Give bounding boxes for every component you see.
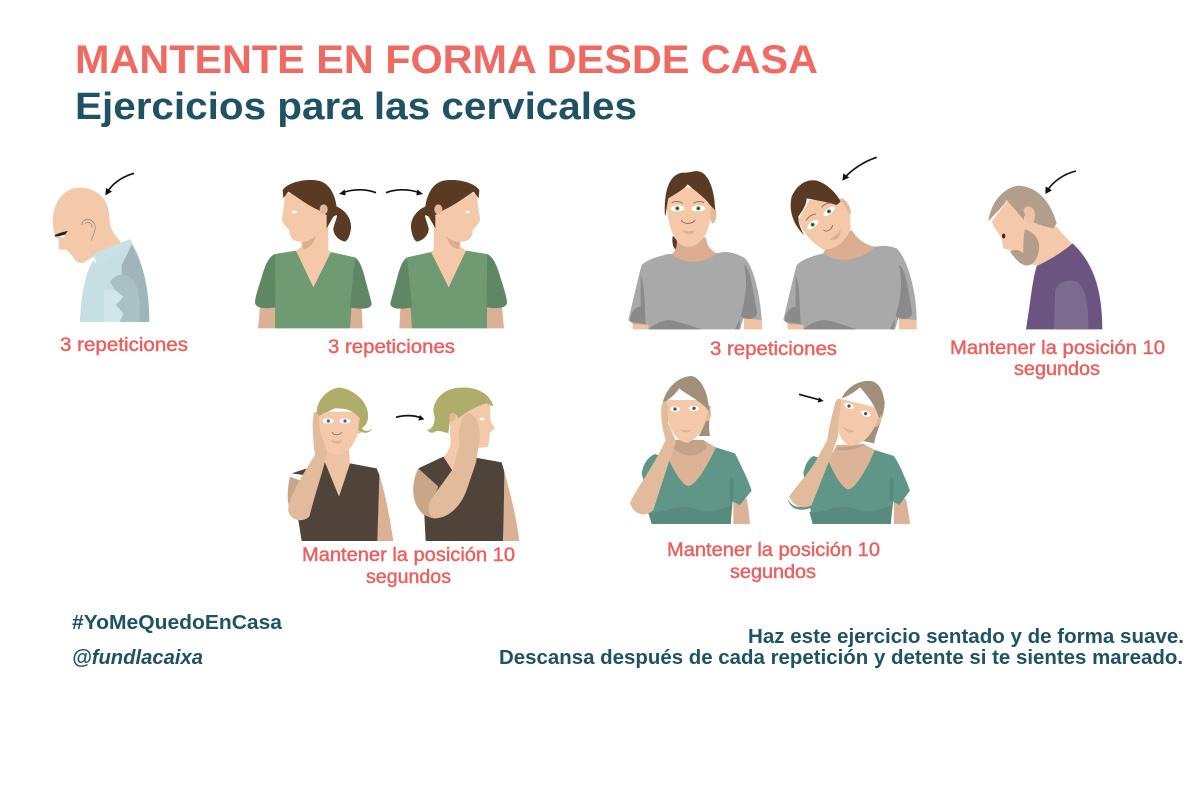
beard xyxy=(1010,229,1039,266)
sleeve edge xyxy=(788,498,812,510)
ear xyxy=(837,197,853,217)
hair xyxy=(665,171,715,217)
hair xyxy=(283,180,351,242)
chest xyxy=(828,444,875,489)
upper arm xyxy=(288,477,302,517)
shirt xyxy=(80,239,149,322)
shirt xyxy=(292,462,379,541)
eye xyxy=(465,211,470,213)
face xyxy=(799,198,851,249)
back hair xyxy=(862,400,885,443)
hair xyxy=(427,388,493,433)
eye xyxy=(1002,234,1005,238)
exercise 3: woman tilting head xyxy=(783,157,917,329)
label: exercise 5: Mantener la posición 10 xyxy=(302,544,515,566)
eyes xyxy=(670,406,680,412)
neck xyxy=(672,237,717,262)
neck and neckline xyxy=(325,450,350,497)
head xyxy=(665,171,715,247)
arrow xyxy=(386,189,423,195)
nose xyxy=(681,220,695,223)
ponytail xyxy=(824,247,830,253)
advice note: Haz este ejercicio sentado y de forma suave. xyxy=(748,626,1184,648)
mouth xyxy=(680,429,692,432)
shirt xyxy=(1026,243,1102,329)
neck shadow xyxy=(837,444,865,450)
exercise 6: woman tilting head against hand xyxy=(788,381,910,524)
upper arm xyxy=(413,468,438,518)
exercise 6: woman hand on cheek xyxy=(630,376,752,524)
hair xyxy=(317,388,372,433)
forearm and hand xyxy=(429,413,480,518)
shirt shadows xyxy=(630,265,757,329)
nose xyxy=(823,225,833,231)
shirt xyxy=(407,251,487,328)
shirt shadows xyxy=(785,265,912,329)
advice note: Descansa después de cada repetición y detente si te sientes mareado. xyxy=(499,647,1183,669)
far arm xyxy=(377,472,393,541)
advice note xyxy=(499,626,1184,669)
face and neck xyxy=(443,403,495,490)
hair xyxy=(411,180,479,242)
far arm xyxy=(503,468,519,541)
label: exercise 3: 3 repeticiones xyxy=(710,338,837,360)
subtitle: Ejercicios para las cervicales xyxy=(75,86,637,128)
brow and eye xyxy=(55,232,67,236)
mouth xyxy=(829,230,841,240)
arms xyxy=(258,307,363,328)
eyes xyxy=(323,418,334,424)
face and neckline xyxy=(282,193,331,287)
eyes xyxy=(806,218,820,231)
label: exercise 4 xyxy=(950,337,1165,380)
eyes xyxy=(670,205,684,211)
shirt xyxy=(803,450,910,524)
exercise 1: bald man bending head forward xyxy=(53,173,149,322)
arrow xyxy=(396,415,424,421)
ear xyxy=(449,413,456,421)
head xyxy=(53,188,123,265)
label: exercise 4: Mantener la posición 10 xyxy=(950,337,1165,359)
exercise 3: woman facing front xyxy=(628,171,762,329)
face and neck xyxy=(992,200,1077,272)
far arm xyxy=(894,498,910,524)
neck shadow xyxy=(673,440,707,456)
label: exercise 6: Mantener la posición 10 xyxy=(667,539,880,561)
shirt shadows xyxy=(649,478,734,524)
arms xyxy=(399,307,504,328)
ear xyxy=(872,412,883,428)
label: exercise 1: 3 repeticiones xyxy=(60,334,188,356)
exercise 5: blonde woman hand on cheek xyxy=(288,388,393,541)
sleeve highlight xyxy=(1054,281,1088,329)
hashtag: #YoMeQuedoEnCasa xyxy=(72,612,283,634)
hair xyxy=(791,180,841,235)
hair xyxy=(842,381,884,418)
face xyxy=(836,398,879,445)
far arm xyxy=(733,498,750,524)
exercise 5: blonde woman turning head with hand xyxy=(396,388,519,541)
face xyxy=(665,400,708,443)
mouth xyxy=(682,230,695,234)
ear xyxy=(710,205,716,223)
eye xyxy=(292,211,297,213)
arrow xyxy=(339,189,376,195)
head xyxy=(791,180,853,249)
label: exercise 5 xyxy=(302,544,515,588)
social handle: @fundlacaixa xyxy=(72,647,203,669)
neck shadow xyxy=(302,236,316,249)
sleeves xyxy=(255,254,372,309)
collar xyxy=(93,239,132,266)
arrow xyxy=(799,394,824,403)
ear xyxy=(434,204,442,214)
ear xyxy=(82,219,95,241)
shirt xyxy=(642,447,752,524)
brows xyxy=(672,201,704,203)
shirt xyxy=(628,252,762,329)
sleeves xyxy=(390,254,507,309)
eyes xyxy=(843,402,855,410)
arrow xyxy=(842,157,877,181)
neck shadow xyxy=(446,236,460,249)
neck xyxy=(823,230,875,260)
arrow xyxy=(105,173,134,195)
shirt xyxy=(418,457,504,541)
chest xyxy=(668,440,716,486)
label: exercise 2: 3 repeticiones xyxy=(328,336,455,358)
mouth xyxy=(331,440,343,444)
ear xyxy=(1023,206,1035,224)
exercise 4: bearded man bending head forward xyxy=(988,171,1102,329)
eye xyxy=(480,418,484,420)
arms xyxy=(788,318,917,329)
back hair xyxy=(698,403,711,436)
arms xyxy=(633,318,762,329)
brows xyxy=(806,203,832,221)
hair xyxy=(663,376,709,412)
face xyxy=(317,412,358,455)
arrow xyxy=(1045,171,1076,194)
title: MANTENTE EN FORMA DESDE CASA xyxy=(75,38,818,82)
forearm and hand xyxy=(630,402,676,514)
exercise 2: woman turning head right xyxy=(386,180,507,328)
ear xyxy=(356,416,362,434)
label: exercise 4: segundos xyxy=(1014,358,1100,380)
hair xyxy=(988,186,1057,228)
ear xyxy=(320,204,328,214)
ponytail xyxy=(672,236,679,251)
shirt shadows xyxy=(809,478,894,524)
mouth xyxy=(843,427,855,432)
shirt xyxy=(275,251,355,328)
label: exercise 6: segundos xyxy=(730,561,816,583)
face and neckline xyxy=(431,193,480,287)
nose xyxy=(332,432,342,435)
exercise 2: woman turning head left xyxy=(255,180,376,328)
forearm and hand xyxy=(288,412,327,520)
label: exercise 5: segundos xyxy=(366,566,451,588)
shirt xyxy=(783,246,917,329)
label: exercise 6 xyxy=(667,539,880,583)
forearm and hand xyxy=(789,399,841,507)
ear xyxy=(704,405,711,421)
